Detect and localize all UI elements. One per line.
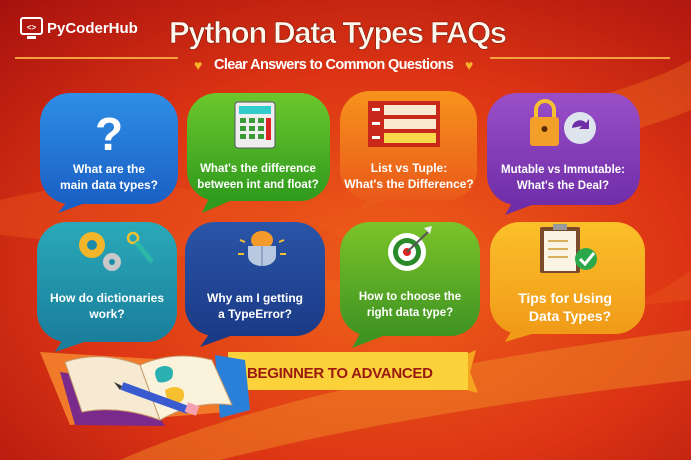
card: TypeError: Why am I getting [207, 291, 303, 305]
ribbon banner [228, 350, 478, 393]
card: main data types: main data types? [60, 178, 158, 192]
logo [21, 18, 138, 39]
title: Python Data Types FAQs [169, 15, 507, 50]
ribbon banner: BEGINNER TO ADVANCED [247, 365, 433, 382]
card: dictionaries: work? [88, 307, 125, 321]
card: main data types [40, 93, 178, 213]
subtitle [15, 57, 670, 73]
card: choose right data type: right data type? [367, 307, 453, 319]
logo: PyCoderHub [47, 20, 138, 37]
card: int vs float: between int and float? [197, 179, 319, 191]
card: tips: Data Types? [529, 308, 611, 324]
card: mutable vs immutable: Mutable vs Immutable: [501, 164, 625, 176]
card: TypeError [185, 222, 325, 347]
card: dictionaries [37, 222, 177, 352]
card: list vs tuple [340, 91, 477, 210]
card: mutable vs immutable [487, 93, 640, 215]
card: int vs float [187, 93, 330, 213]
card: TypeError: a TypeError? [218, 307, 292, 321]
card: tips [490, 222, 645, 342]
card: int vs float: What's the difference [200, 163, 316, 175]
card: choose right data type [340, 222, 480, 348]
card: list vs tuple: List vs Tuple: [371, 161, 447, 175]
icon: open book with pencil [40, 352, 250, 426]
card: dictionaries: How do dictionaries [50, 291, 164, 305]
card: list vs tuple: What's the Difference? [344, 177, 474, 191]
card: choose right data type: How to choose the [359, 291, 461, 303]
logo: <> [27, 23, 36, 32]
subtitle: Clear Answers to Common Questions [214, 57, 454, 73]
card: mutable vs immutable: What's the Deal? [517, 180, 609, 192]
card: main data types: What are the [73, 162, 145, 176]
subtitle: ♥ [465, 57, 473, 73]
card: tips: Tips for Using [518, 290, 612, 306]
card: main data types: ? [95, 108, 123, 160]
subtitle: ♥ [194, 57, 202, 73]
